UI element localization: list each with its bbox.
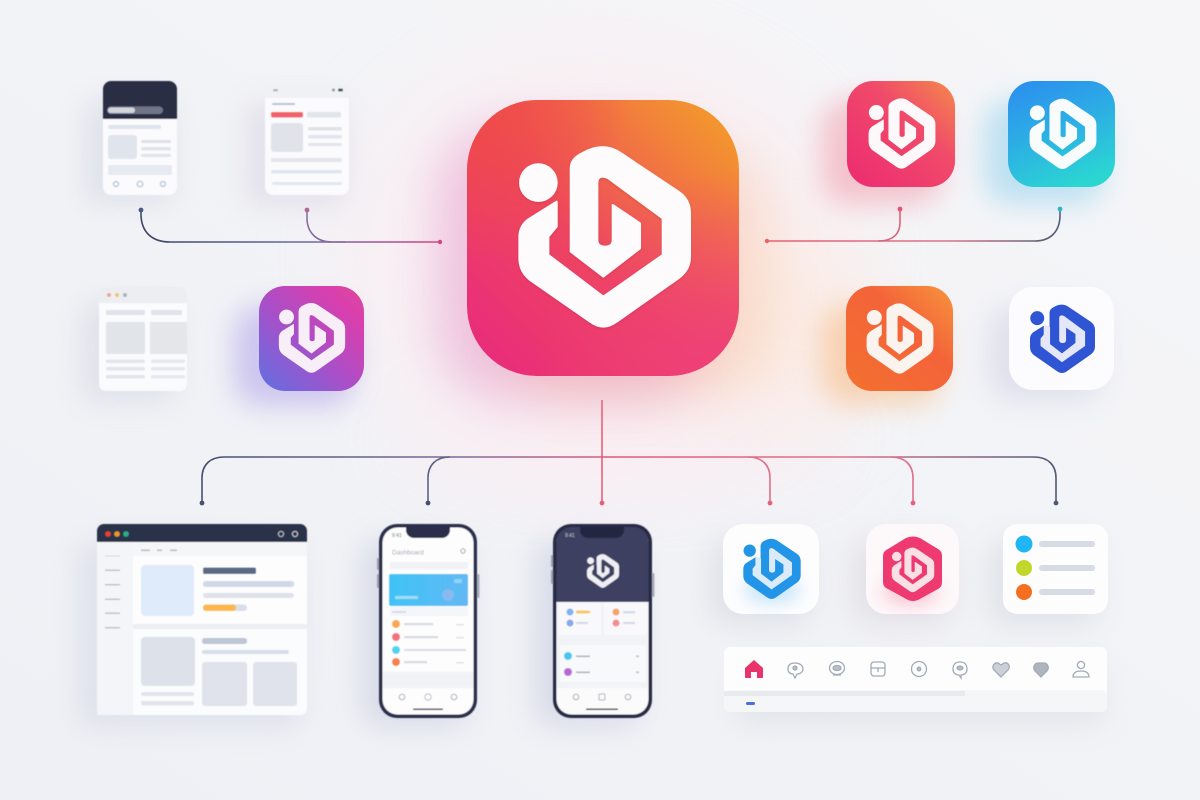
phone wireframe card: top left [84, 81, 177, 204]
app icon: purple [234, 286, 364, 406]
connector: bottom tree [200, 400, 1058, 505]
connector: top right [765, 207, 1062, 243]
web wireframe card: top [245, 85, 349, 206]
phone mockup: light wallet screen: Dashboard [392, 550, 424, 556]
navigation tab bar [724, 647, 1107, 725]
app icon: white with pink hexagon badge [850, 524, 959, 626]
icon: home [745, 660, 763, 678]
browser wireframe card: left [82, 287, 187, 402]
app icon: blue [984, 81, 1115, 204]
phone mockup: light wallet screen: 9:41 [392, 533, 402, 539]
browser mockup: desktop dashboard [78, 524, 307, 728]
app icon: orange [822, 286, 953, 405]
phone mockup: dark logo screen [535, 524, 654, 726]
app icon: white with blue hexagon logo [708, 524, 819, 626]
icon: tab glyphs [788, 661, 1089, 678]
app icon: red [822, 81, 955, 204]
phone mockup: dark logo screen: 9:41 [565, 533, 575, 539]
main app icon [436, 100, 772, 400]
connector: top left [139, 208, 442, 244]
app icon: white with blue logo [988, 287, 1114, 401]
list card [988, 524, 1108, 626]
phone mockup: light wallet screen [362, 524, 480, 726]
